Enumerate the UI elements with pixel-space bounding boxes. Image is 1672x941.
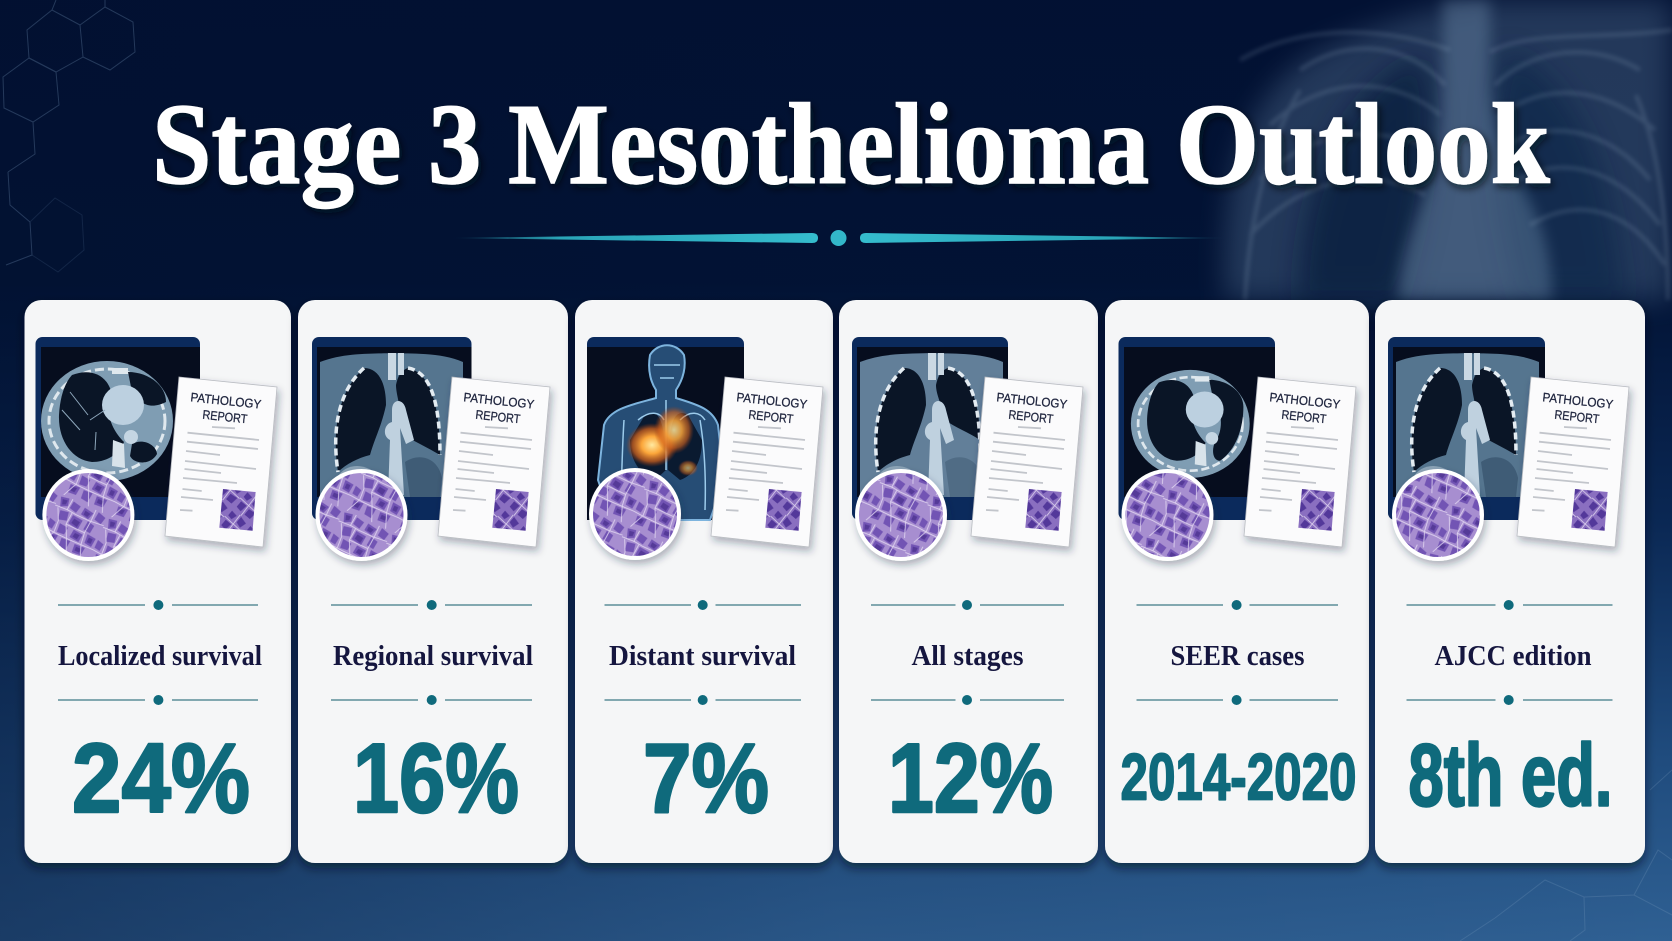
pathology report: REPORT — [1008, 408, 1054, 426]
card background — [1375, 300, 1645, 863]
divider — [1136, 699, 1338, 701]
tissue magnifier — [316, 469, 408, 561]
pathology report — [1244, 377, 1356, 547]
value: 24% — [72, 723, 250, 833]
divider dot — [1504, 600, 1514, 610]
card background — [575, 300, 833, 863]
divider dot — [698, 695, 708, 705]
divider dot — [962, 695, 972, 705]
card background — [24, 300, 291, 863]
divider dot — [698, 600, 708, 610]
pathology report: PATHOLOGY — [996, 390, 1069, 412]
hexagon network top left — [3, 0, 135, 272]
pathology report: REPORT — [475, 408, 521, 426]
value: 2014-2020 — [1120, 740, 1356, 814]
tissue magnifier — [42, 469, 134, 561]
panel: regional survival — [298, 300, 568, 863]
panel: localized survival — [24, 300, 291, 863]
label: AJCC edition — [1434, 641, 1592, 672]
pathology report — [165, 377, 277, 547]
pathology report: PATHOLOGY — [736, 390, 809, 412]
panel: all stages — [839, 300, 1098, 863]
divider — [1406, 699, 1612, 701]
divider dot — [1504, 695, 1514, 705]
card background — [298, 300, 568, 863]
divider — [331, 699, 532, 701]
pathology report: REPORT — [1281, 408, 1327, 426]
tissue magnifier — [1392, 469, 1484, 561]
scan: coronal CT — [312, 337, 472, 520]
divider — [871, 604, 1064, 606]
divider — [871, 699, 1064, 701]
value: 7% — [643, 723, 769, 833]
scan: glowing body — [587, 337, 744, 520]
panel: distant survival — [575, 300, 833, 863]
divider — [58, 604, 258, 606]
value: 12% — [888, 723, 1053, 833]
pathology report: PATHOLOGY — [1542, 390, 1615, 412]
label: Localized survival — [58, 641, 262, 672]
label: All stages — [912, 641, 1024, 672]
divider — [1406, 604, 1612, 606]
divider dot — [1232, 600, 1242, 610]
title: Stage 3 Mesothelioma Outlook — [152, 81, 1550, 208]
tissue magnifier — [589, 468, 681, 560]
divider — [58, 699, 258, 701]
label: SEER cases — [1170, 641, 1305, 672]
divider dot — [427, 695, 437, 705]
scan: coronal CT — [1388, 337, 1545, 520]
pathology report — [438, 377, 550, 547]
pathology report: REPORT — [1554, 408, 1600, 426]
scan: axial CT — [1118, 337, 1275, 520]
card background — [1105, 300, 1369, 863]
pathology report: PATHOLOGY — [1269, 390, 1342, 412]
divider dot — [427, 600, 437, 610]
pathology report — [1517, 377, 1629, 547]
divider — [604, 604, 801, 606]
divider dot — [1232, 695, 1242, 705]
scan: coronal CT — [852, 337, 1008, 520]
label: Regional survival — [333, 641, 533, 672]
panel: SEER cases — [1105, 300, 1369, 863]
title divider — [450, 230, 1228, 246]
divider dot — [153, 695, 163, 705]
card background — [839, 300, 1098, 863]
pathology report: REPORT — [748, 408, 794, 426]
divider — [1136, 604, 1338, 606]
hexagon network bottom right — [1460, 770, 1672, 941]
panel: AJCC edition — [1375, 300, 1645, 863]
scan: axial CT — [36, 337, 200, 520]
pathology report: PATHOLOGY — [190, 390, 263, 412]
tissue magnifier — [855, 469, 947, 561]
divider dot — [962, 600, 972, 610]
pathology report: PATHOLOGY — [463, 390, 536, 412]
divider — [331, 604, 532, 606]
tissue magnifier — [1122, 469, 1214, 561]
divider dot — [153, 600, 163, 610]
chest x-ray backdrop — [1225, 0, 1672, 300]
divider — [604, 699, 801, 701]
pathology report — [711, 377, 823, 547]
value: 16% — [353, 723, 519, 833]
label: Distant survival — [609, 641, 796, 672]
pathology report: REPORT — [202, 408, 248, 426]
pathology report — [971, 377, 1083, 547]
